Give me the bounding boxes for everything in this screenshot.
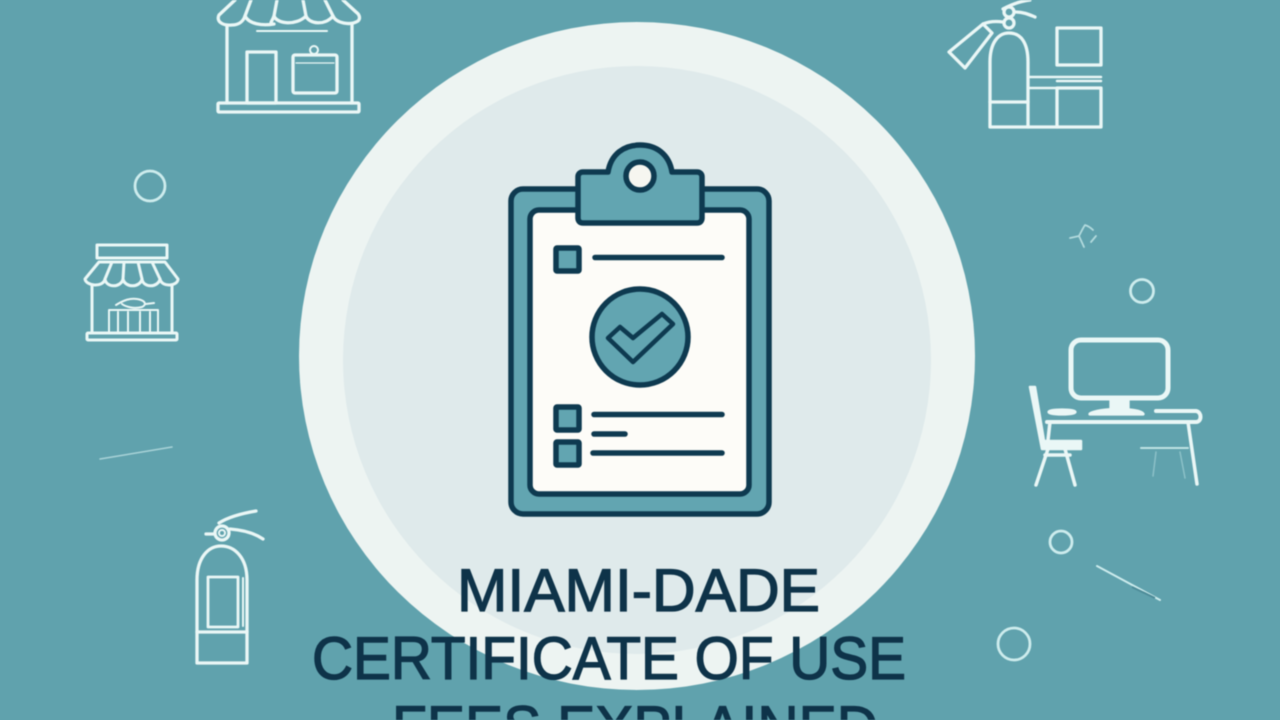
- icon: extinguisher and cabinet: [949, 0, 1101, 127]
- icon: desk with computer and chair: [1030, 340, 1200, 485]
- title: [312, 557, 906, 720]
- inner tinted circle: [343, 66, 931, 654]
- checklist row 1: [556, 248, 722, 271]
- title: CERTIFICATE OF USE: [312, 625, 906, 692]
- checklist row 2: [556, 407, 722, 434]
- clipboard board: [511, 189, 769, 514]
- icon: storefront top: [218, 0, 359, 112]
- decorative line left: [100, 447, 172, 459]
- icon: decorative circle right: [1130, 280, 1154, 302]
- icon: small shop: [85, 245, 178, 340]
- title: MIAMI-DADE: [457, 557, 820, 624]
- clipboard clip: [578, 145, 702, 223]
- icon: small sparkle mark: [1070, 225, 1096, 247]
- icon: decorative circle bottom right: [998, 628, 1030, 660]
- icon: decorative circle top left: [135, 171, 165, 201]
- icon: clipboard with checklist: [511, 145, 769, 514]
- approval check badge: [592, 289, 688, 385]
- clipboard paper: [530, 210, 749, 494]
- clip hole: [626, 162, 654, 190]
- outer pale circle: [299, 22, 975, 690]
- icon: decorative circle lower right: [1050, 531, 1072, 553]
- checklist row 3: [556, 442, 722, 465]
- icon: extinguisher bottom left: [197, 511, 263, 663]
- icon: pen stroke: [1097, 566, 1160, 600]
